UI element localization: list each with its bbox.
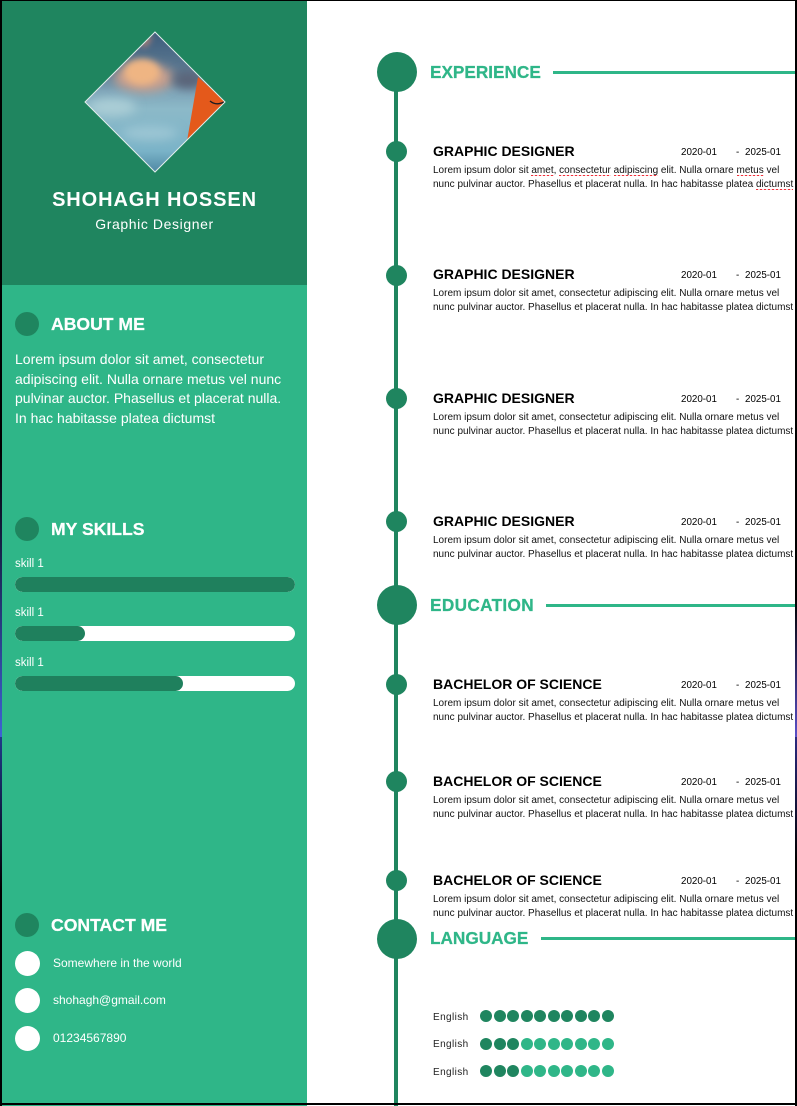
experience item 2	[433, 266, 794, 313]
panel: left sidebar	[0, 0, 307, 1106]
language rule	[541, 937, 797, 940]
education item 2: -	[736, 777, 739, 788]
education item 3: BACHELOR OF SCIENCE	[433, 872, 602, 888]
experience item 1: 2025-01	[745, 147, 781, 158]
education item 1: 2020-01	[681, 680, 717, 691]
education item 3: 2025-01	[745, 876, 781, 887]
heading: my skills: MY SKILLS	[51, 519, 145, 539]
experience item 4: Lorem ipsum dolor sit amet, consectetur adipiscing elit. Nulla ornare metus vel	[433, 535, 779, 546]
education item 2: Lorem ipsum dolor sit amet, consectetur adipiscing elit. Nulla ornare metus vel	[433, 795, 779, 806]
experience item 2: 2025-01	[745, 270, 781, 281]
experience item 1: -	[736, 147, 739, 158]
education item 3: nunc pulvinar auctor. Phasellus et placerat nulla. In hac habitasse platea dictumst	[433, 908, 793, 919]
education item 1: Lorem ipsum dolor sit amet, consectetur adipiscing elit. Nulla ornare metus vel	[433, 698, 779, 709]
experience item 3: GRAPHIC DESIGNER	[433, 390, 575, 406]
heading: language: LANGUAGE	[430, 928, 528, 948]
skill label 1: skill 1	[15, 558, 44, 570]
icon: skills bullet	[15, 517, 39, 541]
education item 1: BACHELOR OF SCIENCE	[433, 676, 602, 692]
job title: Graphic Designer	[95, 216, 214, 232]
language rating 2	[480, 1038, 614, 1050]
experience item 3	[433, 390, 794, 437]
about text: Lorem ipsum dolor sit amet, consectetur	[15, 351, 264, 367]
experience item 4: -	[736, 517, 739, 528]
experience item 2: 2020-01	[681, 270, 717, 281]
experience item 4: nunc pulvinar auctor. Phasellus et placerat nulla. In hac habitasse platea dictumst	[433, 549, 793, 560]
language label 2: English	[433, 1039, 469, 1050]
icon: email	[15, 988, 40, 1013]
experience item 1: Lorem ipsum dolor sit amet, consectetur adipiscing elit. Nulla ornare metus vel	[433, 165, 779, 176]
skill label 2: skill 1	[15, 607, 44, 619]
education item 2: 2025-01	[745, 777, 781, 788]
education item 2: 2020-01	[681, 777, 717, 788]
education rule	[546, 604, 797, 607]
icon: education node	[377, 585, 417, 625]
skill bar 1	[15, 577, 295, 592]
experience rule	[553, 71, 797, 74]
skill bar 2	[15, 626, 295, 641]
experience item 3: nunc pulvinar auctor. Phasellus et placerat nulla. In hac habitasse platea dictumst	[433, 426, 793, 437]
education item 1	[433, 676, 794, 723]
node 5	[386, 674, 407, 695]
language label 1: English	[433, 1012, 469, 1023]
contact: address: Somewhere in the world	[53, 956, 182, 970]
language rating 1	[480, 1010, 614, 1022]
language rating 3	[480, 1065, 614, 1077]
left edge colour tint	[0, 0, 2, 1106]
heading: experience: EXPERIENCE	[430, 62, 541, 82]
about text: adipiscing elit. Nulla ornare metus vel nunc	[15, 370, 281, 386]
education item 2	[433, 773, 794, 820]
education item 3: 2020-01	[681, 876, 717, 887]
skill bar 3	[15, 676, 295, 691]
heading: education: EDUCATION	[430, 595, 534, 615]
education item 1: 2025-01	[745, 680, 781, 691]
experience item 4: GRAPHIC DESIGNER	[433, 513, 575, 529]
experience item 1	[433, 143, 794, 190]
icon: experience node	[377, 52, 417, 92]
experience item 1: nunc pulvinar auctor. Phasellus et placerat nulla. In hac habitasse platea dictumst	[433, 179, 793, 190]
timeline line	[394, 72, 398, 1106]
about text: pulvinar auctor. Phasellus et placerat nulla.	[15, 390, 281, 406]
heading: about me: ABOUT ME	[51, 314, 145, 334]
contact: phone: 01234567890	[53, 1031, 126, 1045]
experience item 1: 2020-01	[681, 147, 717, 158]
node 7	[386, 870, 407, 891]
experience item 2: Lorem ipsum dolor sit amet, consectetur adipiscing elit. Nulla ornare metus vel	[433, 288, 779, 299]
experience item 2: nunc pulvinar auctor. Phasellus et placerat nulla. In hac habitasse platea dictumst	[433, 302, 793, 313]
icon: language node	[377, 919, 417, 959]
node 2	[386, 265, 407, 286]
panel: profile header	[0, 0, 307, 285]
education item 3	[433, 872, 794, 919]
experience item 3: Lorem ipsum dolor sit amet, consectetur adipiscing elit. Nulla ornare metus vel	[433, 412, 779, 423]
contact: email: shohagh@gmail.com	[53, 993, 166, 1007]
experience item 1: GRAPHIC DESIGNER	[433, 143, 575, 159]
language label 3: English	[433, 1067, 469, 1078]
education item 1: -	[736, 680, 739, 691]
heading: contact me: CONTACT ME	[51, 915, 167, 935]
icon: phone	[15, 1026, 40, 1051]
experience item 4: 2020-01	[681, 517, 717, 528]
icon: diamond profile photo	[84, 31, 226, 173]
right edge colour tint	[795, 0, 797, 1106]
icon: contact bullet	[15, 913, 39, 937]
name: SHOHAGH HOSSEN	[52, 189, 257, 211]
experience item 3: -	[736, 394, 739, 405]
experience item 4: 2025-01	[745, 517, 781, 528]
experience item 3: 2020-01	[681, 394, 717, 405]
education item 1: nunc pulvinar auctor. Phasellus et placerat nulla. In hac habitasse platea dictumst	[433, 712, 793, 723]
experience item 2: GRAPHIC DESIGNER	[433, 266, 575, 282]
node 3	[386, 388, 407, 409]
experience item 4	[433, 513, 794, 560]
about text	[15, 351, 281, 426]
experience item 2: -	[736, 270, 739, 281]
icon: about bullet	[15, 312, 39, 336]
education item 3: -	[736, 876, 739, 887]
skill label 3: skill 1	[15, 657, 44, 669]
experience item 3: 2025-01	[745, 394, 781, 405]
about text: In hac habitasse platea dictumst	[15, 410, 215, 426]
education item 2: nunc pulvinar auctor. Phasellus et placerat nulla. In hac habitasse platea dictumst	[433, 809, 793, 820]
icon: location	[15, 951, 40, 976]
node 4	[386, 511, 407, 532]
node 6	[386, 771, 407, 792]
education item 3: Lorem ipsum dolor sit amet, consectetur adipiscing elit. Nulla ornare metus vel	[433, 894, 779, 905]
node 1	[386, 141, 407, 162]
education item 2: BACHELOR OF SCIENCE	[433, 773, 602, 789]
